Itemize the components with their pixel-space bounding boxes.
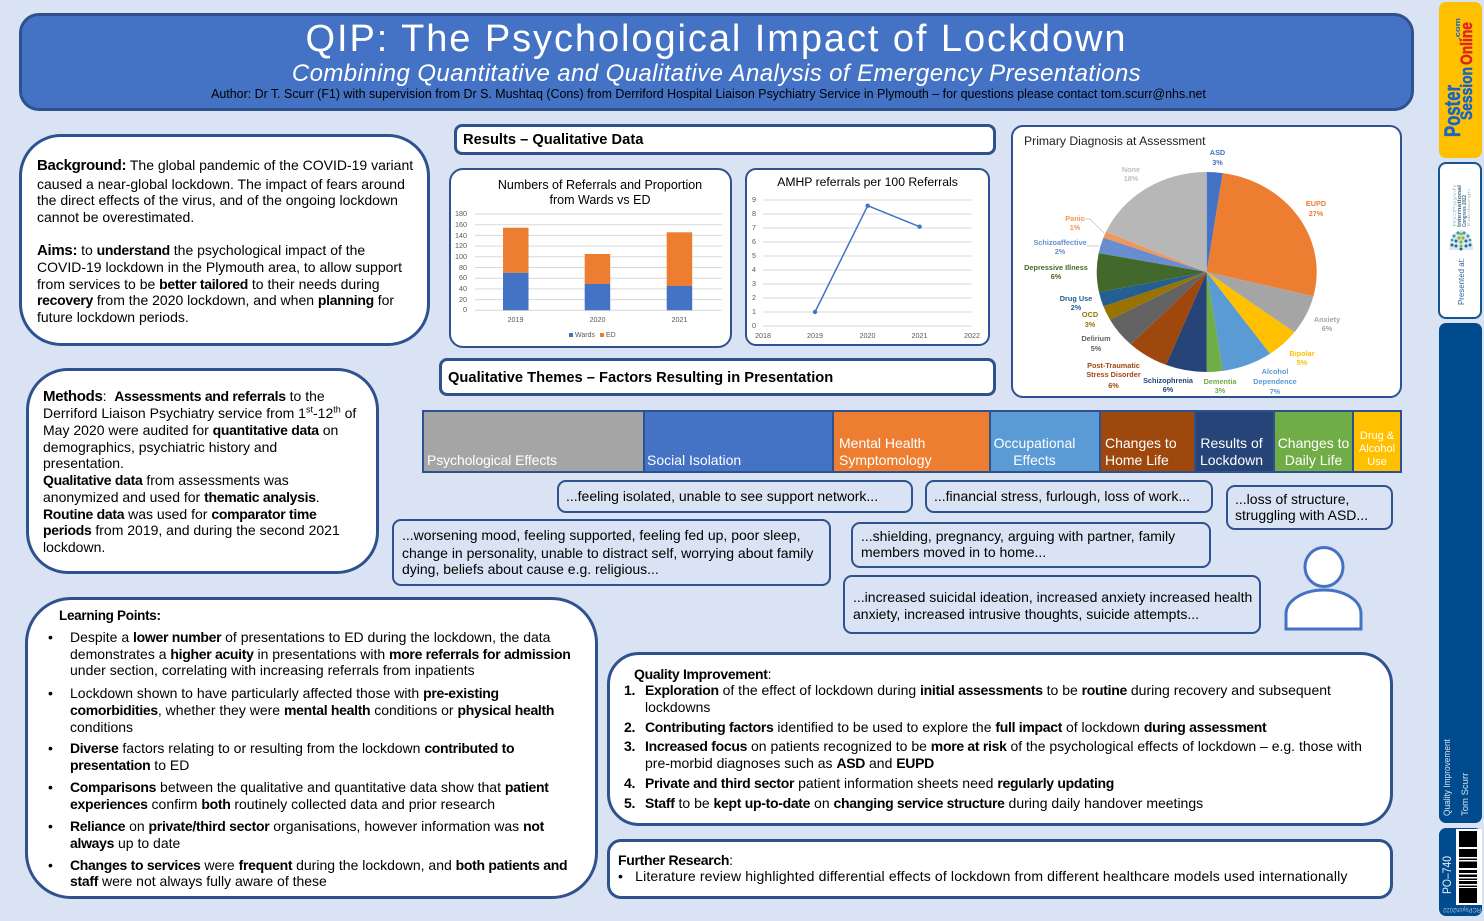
text: methods: lockdown. <box>43 539 105 555</box>
panel: AMHP line chart: 2022 <box>964 331 980 340</box>
heading: qualitative themes: Qualitative Themes – Factors Resulting in Presentation <box>448 370 833 386</box>
sidebar: poster number and barcode: RCPsych2022 <box>1443 906 1481 913</box>
text: aims <box>37 242 402 325</box>
sidebar: poster session online logo: Online <box>1457 22 1476 65</box>
panel: AMHP line chart: 2 <box>752 293 756 302</box>
sidebar: category panel: Tom Scurr <box>1460 773 1471 816</box>
text: methods: May 2020 were audited for quantitative data on <box>43 422 338 438</box>
panel: quality improvement <box>607 652 1393 826</box>
quote: psychological effects: ...worsening mood, feeling supported, feeling fed up, poor sleep, <box>402 527 800 543</box>
panel: primary diagnosis pie chart: 3% <box>1215 386 1226 395</box>
panel: referrals bar chart: 2021 <box>672 315 688 324</box>
panel: AMHP line chart <box>745 168 990 346</box>
text: methods: presentation. <box>43 455 124 471</box>
list: learning points: Lockdown shown to have particularly affected those with pre-existing <box>70 685 499 701</box>
text: further research: • Literature review highlighted differential effects of lockdown from different healthcare models used internationally <box>618 868 1348 884</box>
theme: occupational effects: Occupational <box>994 435 1075 451</box>
sidebar: presented at panel: Presented at: <box>1456 258 1466 305</box>
panel: AMHP line chart: 9 <box>752 195 756 204</box>
list: learning points: comorbidities, whether they were mental health conditions or physical health <box>70 702 554 718</box>
quote: home life <box>851 522 1211 568</box>
list: quality improvement: Private and third sector patient information sheets need regularly updating <box>645 775 1114 791</box>
panel: referrals bar chart: 2019 <box>508 315 524 324</box>
panel: further research <box>607 839 1393 899</box>
panel: AMHP line chart: 2018 <box>755 331 771 340</box>
text: methods: demographics, psychiatric history and <box>43 439 277 455</box>
heading: further research: Further Research: <box>618 852 733 868</box>
theme: psychological effects: Psychological Effects <box>427 452 557 468</box>
panel: primary diagnosis pie chart: 27% <box>1309 209 1324 218</box>
theme: occupational effects <box>990 411 1100 472</box>
panel: primary diagnosis pie chart: 1% <box>1070 223 1081 232</box>
panel: primary diagnosis pie chart <box>1011 125 1402 398</box>
sidebar: presented at panel: RCPsych <box>1452 184 1457 227</box>
list: learning points: always up to date <box>70 835 180 851</box>
panel: primary diagnosis pie chart: 18% <box>1124 174 1139 183</box>
panel: referrals bar chart: 2020 <box>590 315 606 324</box>
text: methods: anonymized and used for thematic analysis. <box>43 489 320 505</box>
main title: QIP: The Psychological Impact of Lockdown <box>306 18 1127 60</box>
panel: primary diagnosis pie chart: Depressive Illness <box>1024 263 1088 272</box>
panel: primary diagnosis pie chart: Primary Diagnosis at Assessment <box>1024 134 1206 148</box>
panel: methods <box>26 368 379 574</box>
panel: referrals bar chart: 20 <box>459 295 467 304</box>
panel: referrals bar chart: 140 <box>455 231 467 240</box>
panel: primary diagnosis pie chart: Schizophrenia <box>1143 376 1194 385</box>
text: methods: Derriford Liaison Psychiatry service from 1st-12th of <box>43 404 356 421</box>
quote: occupational <box>925 480 1213 513</box>
heading: quality improvement: Quality Improvement: <box>634 666 771 682</box>
heading: learning points: Learning Points: <box>59 608 161 623</box>
icon: person <box>1284 546 1362 630</box>
sidebar: poster session online logo: Poster <box>1440 85 1465 137</box>
panel: referrals bar chart: 0 <box>463 305 467 314</box>
panel: referrals bar chart: 160 <box>455 220 467 229</box>
panel: referrals bar chart: 100 <box>455 252 467 261</box>
panel: primary diagnosis pie chart: 6% <box>1163 385 1174 394</box>
panel: primary diagnosis pie chart: Stress Disorder <box>1086 370 1141 379</box>
panel: primary diagnosis pie chart: 3% <box>1085 320 1096 329</box>
list: learning points: • <box>48 818 53 834</box>
subtitle: Combining Quantitative and Qualitative Analysis of Emergency Presentations <box>292 60 1141 87</box>
quote: symptomology: anxiety, increased intrusive thoughts, suicide attempts... <box>853 606 1199 622</box>
theme bar: qualitative themes <box>422 410 1402 473</box>
list: quality improvement: pre-morbid diagnoses such as ASD and EUPD <box>645 755 934 771</box>
panel: primary diagnosis pie chart: 5% <box>1297 358 1308 367</box>
list: quality improvement: 4. <box>624 775 635 791</box>
panel: referrals bar chart: Wards <box>575 332 595 339</box>
panel: AMHP line chart: AMHP referrals per 100 Referrals <box>777 175 958 189</box>
panel: learning points <box>25 597 598 899</box>
list: quality improvement: 1. <box>624 682 635 698</box>
quote: daily life <box>1226 485 1393 530</box>
text: aims: from services to be better tailored to their needs during <box>37 276 380 292</box>
list: quality improvement: Staff to be kept up-to-date on changing service structure during daily handover meetings <box>645 795 1203 811</box>
panel: referrals bar chart: from Wards vs ED <box>550 193 650 207</box>
quote: symptomology <box>843 575 1261 634</box>
list: quality improvement: Contributing factors identified to be used to explore the full impact of lockdown during assessment <box>645 719 1266 735</box>
panel: referrals bar chart: 40 <box>459 284 467 293</box>
list: quality improvement: 5. <box>624 795 635 811</box>
quote: daily life: struggling with ASD... <box>1235 507 1368 523</box>
author line: Author: Dr T. Scurr (F1) with supervision from Dr S. Mushtaq (Cons) from Derriford Hospital Liaison Psychiatry Service in Plymouth – for questions please contact tom.scurr@nhs.net <box>211 87 1206 101</box>
list: quality improvement <box>624 682 1362 811</box>
panel: primary diagnosis pie chart: Anxiety <box>1314 315 1341 324</box>
list: learning points: Changes to services were frequent during the lockdown, and both patients and <box>70 857 567 873</box>
theme: occupational effects: Effects <box>1013 452 1056 468</box>
panel: AMHP line chart: 2021 <box>912 331 928 340</box>
text: methods: Routine data was used for comparator time <box>43 506 317 522</box>
panel: primary diagnosis pie chart: 6% <box>1051 272 1062 281</box>
quote: social isolation <box>557 480 913 513</box>
sidebar: poster session online logo: .com <box>1455 18 1462 40</box>
list: learning points: Despite a lower number of presentations to ED during the lockdown, the data <box>70 629 550 645</box>
panel: referrals bar chart: Numbers of Referrals and Proportion <box>498 178 702 192</box>
theme: changes to home life: Changes to <box>1105 435 1177 451</box>
sidebar: presented at panel: International <box>1457 184 1463 227</box>
panel: primary diagnosis pie chart: 3% <box>1212 158 1223 167</box>
sidebar: presented at panel <box>1438 162 1482 319</box>
sidebar: poster session online logo: Session <box>1457 67 1476 120</box>
theme: results of lockdown: Results of <box>1200 435 1263 451</box>
text: methods: Qualitative data from assessments was <box>43 472 289 488</box>
panel: primary diagnosis pie chart: 5% <box>1091 344 1102 353</box>
text: background <box>37 157 414 225</box>
theme: social isolation <box>644 411 833 472</box>
panel: referrals bar chart: ED <box>606 332 616 339</box>
list: learning points: Diverse factors relating to or resulting from the lockdown contributed to <box>70 740 514 756</box>
quote: psychological effects: dying, beliefs about cause e.g. religious... <box>402 561 659 577</box>
panel: AMHP line chart: 4 <box>752 265 756 274</box>
panel: AMHP line chart: 2019 <box>807 331 823 340</box>
panel: primary diagnosis pie chart: 2% <box>1071 303 1082 312</box>
panel: primary diagnosis pie chart: Post-Traumatic <box>1087 361 1140 370</box>
panel: primary diagnosis pie chart: 2% <box>1055 247 1066 256</box>
sidebar: poster number and barcode <box>1439 828 1482 916</box>
panel: AMHP line chart: 7 <box>752 223 756 232</box>
panel: referrals bar chart: 180 <box>455 209 467 218</box>
list: learning points: demonstrates a higher acuity in presentations with more referrals for admission <box>70 646 570 662</box>
list: learning points: staff were not always fully aware of these <box>70 873 327 889</box>
list: quality improvement: Exploration of the effect of lockdown during initial assessments to be routine during recovery and subsequent <box>645 682 1331 698</box>
panel: primary diagnosis pie chart: Delirium <box>1081 334 1111 343</box>
panel: primary diagnosis pie chart: Schizoaffective <box>1033 238 1087 247</box>
list: learning points <box>48 629 570 889</box>
theme: drug and alcohol use: Drug & <box>1360 430 1394 442</box>
sidebar: poster number and barcode: PO–740 <box>1440 856 1454 894</box>
text: background: cannot be overestimated. <box>37 209 194 225</box>
theme: social isolation: Social Isolation <box>647 452 741 468</box>
quote: social isolation: ...feeling isolated, unable to see support network... <box>566 488 878 504</box>
panel: primary diagnosis pie chart: Drug Use <box>1060 294 1092 303</box>
quote: occupational: ...financial stress, furlough, loss of work... <box>934 488 1190 504</box>
text: aims: recovery from the 2020 lockdown, and when planning for <box>37 292 394 308</box>
text: aims: Aims: to understand the psychological impact of the <box>37 242 365 259</box>
list: learning points: conditions <box>70 719 133 735</box>
list: learning points: • <box>48 629 53 645</box>
panel: primary diagnosis pie chart: 7% <box>1270 387 1281 396</box>
list: quality improvement: Increased focus on patients recognized to be more at risk of the psychological effects of lockdown – e.g. those with <box>645 738 1362 754</box>
panel: AMHP line chart: 3 <box>752 279 756 288</box>
theme: mental health symptomology <box>833 411 990 472</box>
list: learning points: presentation to ED <box>70 757 189 773</box>
list: learning points: • <box>48 740 53 756</box>
heading: results qualitative data <box>454 124 996 155</box>
quote: home life: members moved in to home... <box>861 544 1046 560</box>
list: quality improvement: 2. <box>624 719 635 735</box>
text: aims: future lockdown periods. <box>37 309 189 325</box>
list: learning points: Comparisons between the qualitative and quantitative data show that patient <box>70 779 549 795</box>
panel: referrals bar chart: 80 <box>459 263 467 272</box>
theme: changes to home life <box>1100 411 1195 472</box>
theme: changes to daily life: Changes to <box>1278 435 1349 451</box>
text: aims: COVID-19 lockdown in the Plymouth area, to allow support <box>37 259 402 275</box>
list: learning points: experiences confirm both routinely collected data and prior research <box>70 796 495 812</box>
sidebar: presented at panel: Edinburgh <box>1467 189 1471 227</box>
panel: primary diagnosis pie chart: Bipolar <box>1289 349 1315 358</box>
list: learning points: • <box>48 685 53 701</box>
panel: AMHP line chart: 8 <box>752 209 756 218</box>
theme: drug and alcohol use: Alcohol <box>1359 443 1395 455</box>
list: learning points: • <box>48 857 53 873</box>
theme: changes to daily life <box>1274 411 1353 472</box>
panel: primary diagnosis pie chart: Panic <box>1065 214 1085 223</box>
panel: referrals bar chart: 60 <box>459 273 467 282</box>
panel: primary diagnosis pie chart: Dementia <box>1204 377 1237 386</box>
quote: daily life: ...loss of structure, <box>1235 491 1349 507</box>
panel: primary diagnosis pie chart: None <box>1122 165 1140 174</box>
list: learning points: Reliance on private/third sector organisations, however information was not <box>70 818 544 834</box>
list: quality improvement: 3. <box>624 738 635 754</box>
theme: psychological effects <box>423 411 644 472</box>
quote: symptomology: ...increased suicidal ideation, increased anxiety increased health <box>853 589 1252 605</box>
panel: primary diagnosis pie chart: Dependence <box>1253 377 1297 386</box>
panel: AMHP line chart: 5 <box>752 251 756 260</box>
theme: changes to home life: Home Life <box>1105 452 1169 468</box>
theme: results of lockdown: Lockdown <box>1200 452 1263 468</box>
theme: mental health symptomology: Mental Health <box>839 435 925 451</box>
panel: primary diagnosis pie chart: ASD <box>1210 148 1225 157</box>
theme: drug and alcohol use <box>1353 411 1401 472</box>
panel: primary diagnosis pie chart: Alcohol <box>1262 367 1288 376</box>
sidebar: category panel: Quality Improvement <box>1442 739 1453 816</box>
panel: referrals bar chart <box>449 168 732 348</box>
sidebar: poster session online logo <box>1439 2 1482 158</box>
title banner <box>19 13 1414 111</box>
theme: changes to daily life: Daily Life <box>1285 452 1342 468</box>
text: background: caused a near-global lockdown. The impact of fears around <box>37 176 405 192</box>
theme: results of lockdown <box>1195 411 1274 472</box>
panel: AMHP line chart: 1 <box>752 307 756 316</box>
list: quality improvement: lockdowns <box>645 699 710 715</box>
panel: primary diagnosis pie chart: 6% <box>1108 381 1119 390</box>
text: methods: Methods: Assessments and referrals to the <box>43 388 325 405</box>
panel: primary diagnosis pie chart: OCD <box>1082 310 1098 319</box>
sidebar: presented at panel: Congress 2022 <box>1462 195 1468 227</box>
panel: AMHP line chart: 6 <box>752 237 756 246</box>
text: background: the direct effects of the virus, and of the ongoing lockdown <box>37 192 398 208</box>
theme: drug and alcohol use: Use <box>1367 456 1387 468</box>
text: background: Background: The global pandemic of the COVID-19 variant <box>37 157 413 174</box>
heading: results qualitative data: Results – Qualitative Data <box>463 132 643 148</box>
quote: home life: ...shielding, pregnancy, arguing with partner, family <box>861 528 1175 544</box>
list: learning points: under section, correlating with increasing referrals from inpatients <box>70 662 475 678</box>
theme: mental health symptomology: Symptomology <box>839 452 932 468</box>
panel: AMHP line chart: 0 <box>752 321 756 330</box>
list: learning points: • <box>48 779 53 795</box>
heading: qualitative themes <box>439 358 996 396</box>
quote: psychological effects: change in personality, unable to distract self, worrying about family <box>402 545 813 561</box>
panel: referrals bar chart: 120 <box>455 241 467 250</box>
text: methods <box>43 388 356 555</box>
panel: AMHP line chart: 2020 <box>860 331 876 340</box>
panel: primary diagnosis pie chart: EUPD <box>1306 199 1326 208</box>
panel: primary diagnosis pie chart: 6% <box>1322 324 1333 333</box>
quote: psychological effects <box>392 519 831 586</box>
panel: background and aims <box>19 134 430 346</box>
text: methods: periods from 2019, and during the second 2021 <box>43 522 340 538</box>
sidebar: category panel <box>1439 323 1482 823</box>
